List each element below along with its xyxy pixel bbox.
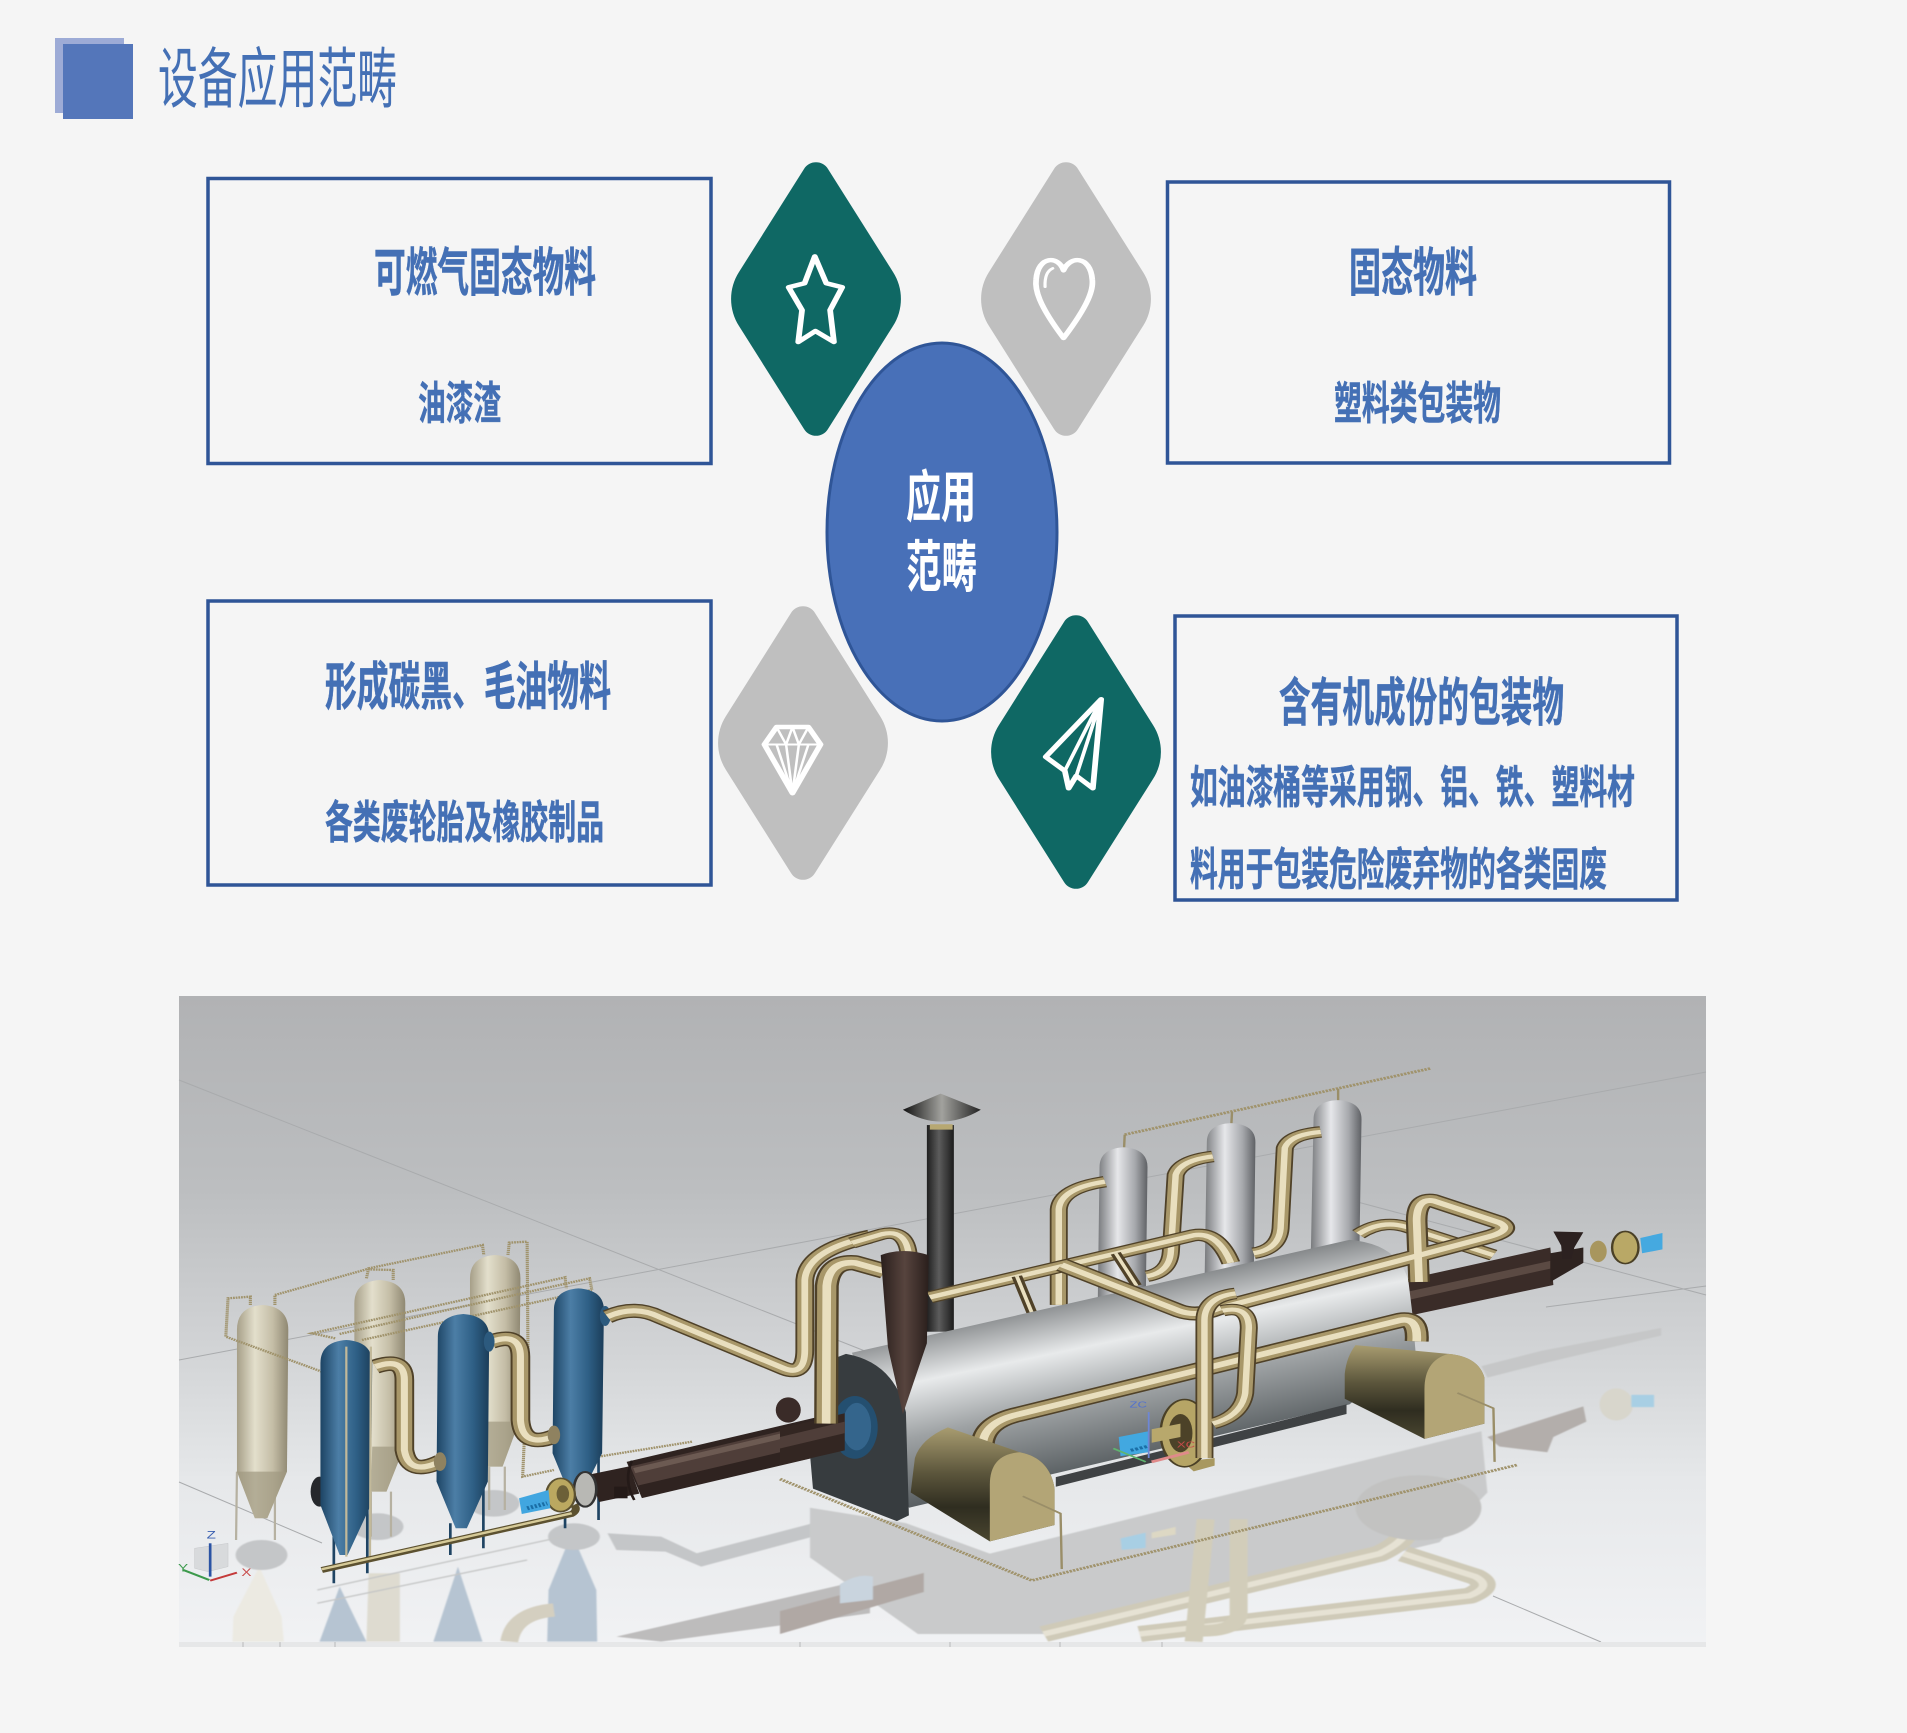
pipe: rear loop: [1359, 1224, 1493, 1255]
panel text line 1: 如油漆桶等采用钢、铝、铁、塑料材: [1190, 762, 1635, 813]
feed tube: [594, 1397, 870, 1500]
beige tower 1: [236, 1305, 288, 1540]
reflections and shadows on the floor: left: [232, 1490, 870, 1642]
burner box rear: [1345, 1345, 1493, 1439]
panel heading: 可燃气固态物料: [374, 245, 596, 303]
feed motor and flange: [519, 1472, 596, 1514]
pipe: top bend to cyclone: [852, 1233, 909, 1257]
panel: solid materials: [1168, 182, 1670, 463]
panel: carbon black and crude oil materials: [208, 601, 711, 885]
panel heading: 形成碳黑、毛油物料: [325, 659, 611, 717]
blue tower 2: [434, 1314, 495, 1555]
panel text line 2: 料用于包装危险废弃物的各类固废: [1190, 844, 1607, 895]
coil pipe above silver towers: [1124, 1068, 1430, 1147]
reflections and shadows on the floor: right: [780, 1328, 1661, 1642]
work coordinate axes: ZC: [1130, 1401, 1147, 1410]
blue tower 3: [548, 1288, 611, 1528]
axis triad: [178, 1528, 252, 1581]
central label line 2: 范畴: [906, 536, 977, 599]
pipe: upper rail: [930, 1235, 1231, 1297]
work coordinate axes: [1113, 1401, 1195, 1462]
picture: pyrolysis plant 3D model: [178, 996, 1706, 1647]
furnace drum: [810, 1240, 1415, 1521]
chimney: [903, 1094, 981, 1332]
pipe: tower 3 to furnace: [607, 1237, 870, 1370]
central ellipse: [827, 343, 1057, 721]
pipe: short braces: [1017, 1253, 1137, 1313]
blue tower 1: [311, 1340, 372, 1583]
axis triad: X: [241, 1566, 252, 1578]
pipe: upper front rail: [1062, 1200, 1504, 1314]
beige tower 2: [354, 1280, 405, 1537]
axis triad: Y: [178, 1561, 188, 1574]
title block: [55, 38, 397, 119]
axis triad: Z: [207, 1528, 216, 1541]
panel heading: 固态物料: [1349, 245, 1477, 303]
panel: packaging with organic content: [1175, 616, 1677, 900]
burner box front: [911, 1427, 1061, 1541]
cyclone: [881, 1251, 929, 1414]
icon: diamond gem: [764, 727, 821, 793]
pipe: silver tower 3: [1254, 1132, 1321, 1253]
pipe: between towers 1 and 2: [375, 1364, 440, 1467]
coil pipes: [226, 1242, 692, 1477]
work coordinate axes: XC: [1177, 1440, 1195, 1450]
diamond: gray bottom left: [718, 606, 888, 880]
diamond: teal bottom right: [991, 615, 1161, 889]
blue flange and feed tube stub: [780, 1396, 878, 1465]
fan unit: [1119, 1399, 1215, 1471]
icon: paper plane: [1046, 699, 1101, 788]
icon: title squares: [55, 38, 133, 119]
beige tower 3: [470, 1255, 520, 1510]
panel text: 塑料类包装物: [1334, 378, 1501, 429]
icon: heart: [1036, 260, 1092, 338]
central label line 1: 应用: [906, 466, 976, 529]
pipe: silver tower 1: [1059, 1182, 1105, 1305]
silver tower 2: [1204, 1123, 1255, 1290]
rear brown tube: [1403, 1231, 1662, 1316]
panel: combustible gas solid materials: [208, 178, 711, 464]
pipe: vertical front loop: [1204, 1293, 1249, 1458]
panel text: 油漆渣: [418, 378, 501, 429]
right section: pyrolysis furnace: [780, 1068, 1662, 1580]
pipe: between towers 2 and 3: [491, 1339, 557, 1440]
outer coil pipe loop: [780, 1393, 1517, 1580]
heading: title: 设备应用范畴: [158, 42, 397, 116]
silver tower 1: [1098, 1147, 1147, 1305]
pipe: long lower rail: [983, 1320, 1417, 1445]
left section: condensers, scrubbers and feed tube: [178, 1237, 870, 1583]
panel heading: 含有机成份的包装物: [1279, 675, 1564, 733]
panel text: 各类废轮胎及橡胶制品: [325, 797, 604, 848]
icon: star: [789, 256, 842, 342]
condensate header pipe: [322, 1505, 576, 1570]
pipe: silver tower 2: [1147, 1156, 1213, 1276]
diamond: teal top left: [731, 162, 901, 436]
pipe: riser: [826, 1263, 885, 1424]
diamond: gray top right: [981, 162, 1151, 436]
silver tower 3: [1311, 1100, 1362, 1267]
